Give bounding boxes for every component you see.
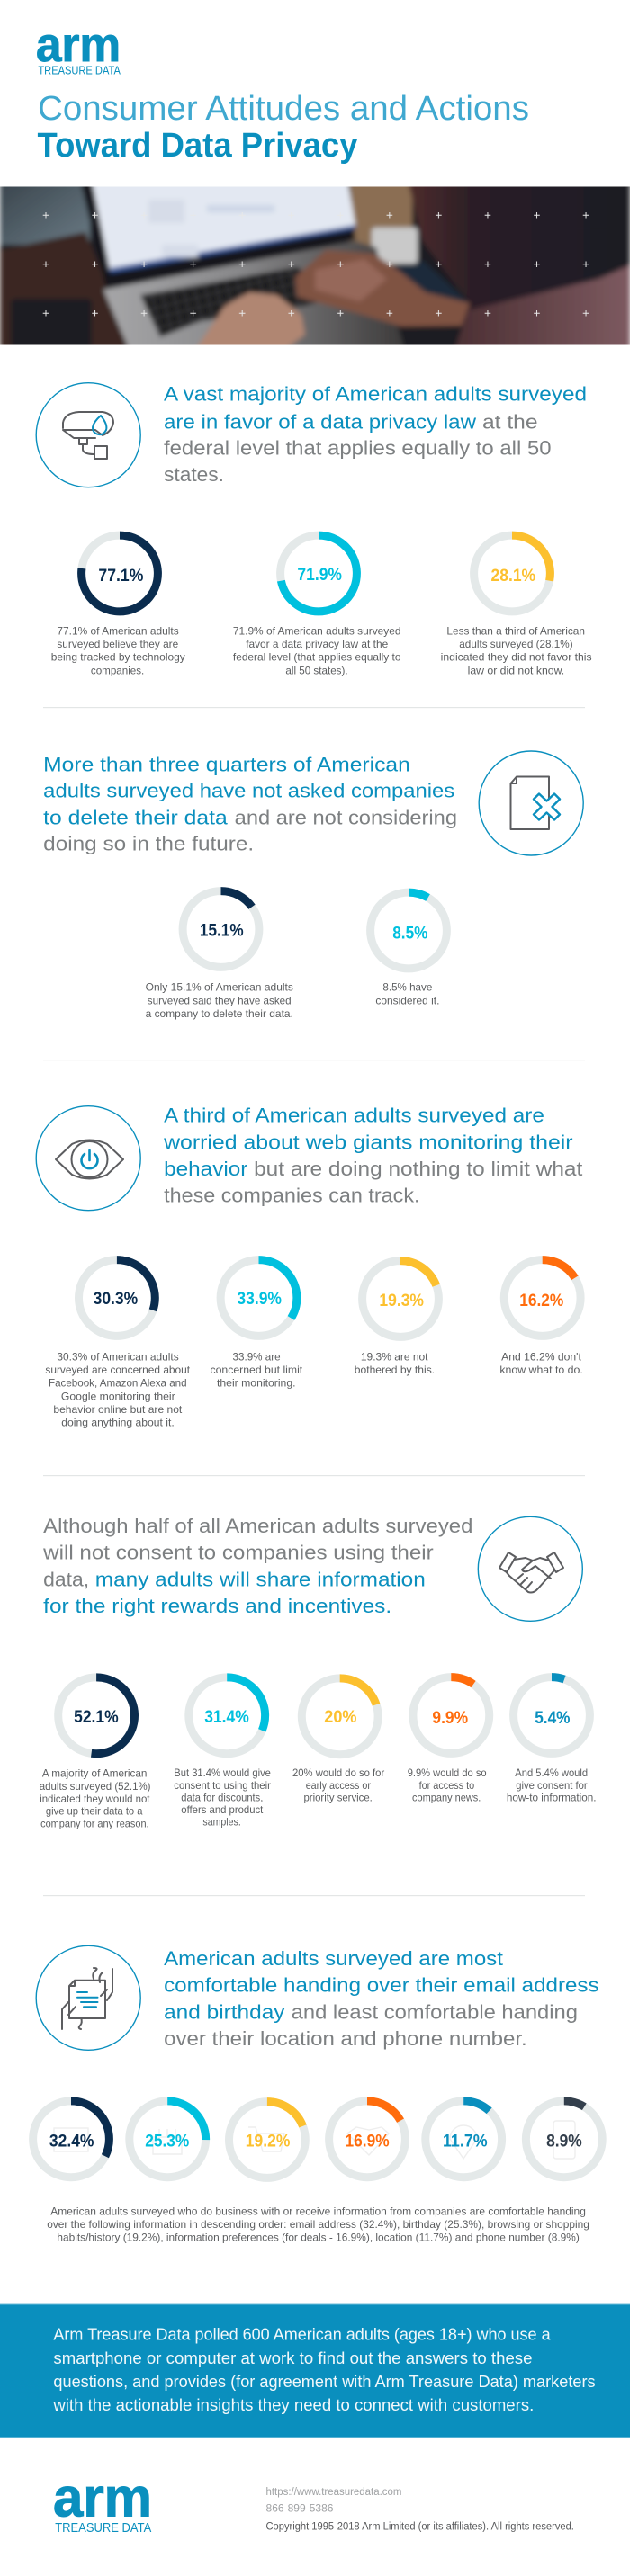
caption: 71.9% (233, 625, 401, 676)
heading: for the right rewards and incentives. (43, 1595, 392, 1617)
caption: 9.9%: 9.9% would do so (408, 1767, 487, 1779)
caption: 20% (292, 1767, 384, 1803)
caption: 30.3%: doing anything about it. (61, 1417, 175, 1429)
footer contact text (266, 2487, 574, 2533)
caption: 71.9%: all 50 states). (285, 664, 348, 676)
donut: 28.1% (474, 535, 550, 612)
caption: 28.1%: indicated they did not favor this (441, 651, 592, 664)
donut: 8.5% (371, 892, 446, 969)
donut: 16.2%: 16.2% (519, 1292, 563, 1310)
caption: 31.4% (174, 1767, 271, 1828)
caption: 71.9%: federal level (that applies equally to (233, 651, 401, 664)
heading: A third of American adults surveyed are (164, 1105, 544, 1127)
heading: states. (164, 463, 224, 486)
icon: handshake (478, 1516, 582, 1621)
heading: will not consent to companies using their (42, 1542, 434, 1564)
panel: methodology band: smartphone or computer at work to find out the answers to these (53, 2348, 532, 2367)
caption: 33.9% (211, 1350, 303, 1390)
caption: 15.1% (146, 981, 293, 1020)
donut: 5.4% (514, 1677, 590, 1753)
caption: 5.4% (507, 1767, 596, 1803)
heading: and are not considering (235, 806, 457, 828)
heading: American adults surveyed are most (164, 1947, 504, 1970)
donut: 30.3%: 30.3% (94, 1290, 138, 1309)
logo: arm treasure data: TREASURE DATA (38, 64, 121, 77)
caption: 15.1%: a company to delete their data. (146, 1007, 293, 1020)
donut: 25.3% birthday: 25.3% (145, 2133, 189, 2151)
caption: 28.1%: Less than a third of American (446, 625, 585, 638)
footer contact text: https://www.treasuredata.com (266, 2487, 401, 2498)
caption: 9.9%: company news. (412, 1791, 481, 1803)
donut: 71.9% (281, 535, 356, 612)
donut: 77.1% (82, 535, 158, 612)
heading: federal level that applies equally to all 50 (164, 437, 551, 460)
footer contact text: Copyright 1995-2018 Arm Limited (or its affiliates). All rights reserved. (266, 2522, 574, 2533)
caption: 77.1%: companies. (91, 664, 144, 676)
caption: 20%: priority service. (304, 1791, 373, 1803)
donut: 15.1% (183, 891, 259, 967)
caption: 15.1%: surveyed said they have asked (148, 994, 292, 1006)
heading (42, 1515, 472, 1617)
donut: 16.9% preferences (329, 2101, 405, 2178)
icon: eye with power symbol (36, 1106, 140, 1211)
donut: 77.1%: 77.1% (98, 567, 143, 586)
panel: methodology band: questions, and provides (for agreement with Arm Treasure Data) marketers (53, 2372, 596, 2391)
heading: worried about web giants monitoring their (163, 1131, 573, 1153)
caption: 31.4%: But 31.4% would give (174, 1767, 271, 1779)
caption: 52.1%: A majority of American (42, 1767, 147, 1780)
caption: 52.1%: give up their data to a (46, 1804, 143, 1817)
caption: 20%: 20% would do so for (292, 1767, 384, 1779)
donut: 19.3%: 19.3% (379, 1292, 424, 1310)
icon: document with cross (479, 751, 583, 855)
caption: 5.4%: And 5.4% would (515, 1767, 588, 1779)
donut: 9.9%: 9.9% (432, 1709, 468, 1728)
donut: 8.9% phone number: 8.9% (546, 2133, 582, 2151)
caption: 28.1% (441, 625, 592, 676)
donut: 52.1% (58, 1677, 135, 1754)
donut: 16.2% (504, 1260, 580, 1336)
donut: 33.9%: 33.9% (237, 1290, 282, 1309)
heading: data, (43, 1568, 89, 1590)
donut: 20%: 20% (324, 1708, 357, 1727)
icon: hands holding a document (36, 1945, 140, 2050)
title: Consumer Attitudes and Actions (38, 90, 529, 128)
donut: 11.7% location: 11.7% (443, 2133, 488, 2151)
caption: 28.1%: law or did not know. (468, 664, 564, 676)
panel: methodology band: Arm Treasure Data polled 600 American adults (ages 18+) who use a (53, 2325, 551, 2344)
panel: web giants monitoring (36, 1105, 583, 1429)
donut: 25.3% birthday (130, 2101, 206, 2178)
heading (164, 1947, 599, 2050)
caption: 31.4%: offers and product (181, 1803, 264, 1816)
caption: 9.9% (408, 1767, 487, 1803)
caption: 77.1%: 77.1% of American adults (57, 625, 179, 638)
donut: 20% (302, 1678, 378, 1755)
caption: 52.1%: indicated they would not (40, 1793, 150, 1805)
title: Toward Data Privacy (38, 127, 358, 165)
caption: descending order list: habits/history (19.2%), information preferences (for deals - 16.9%), location (11.7%) and phone number (8.9%) (57, 2232, 580, 2244)
caption: 5.4%: how-to information. (507, 1791, 596, 1803)
donut: 31.4%: 31.4% (204, 1708, 249, 1727)
caption: 52.1%: adults surveyed (52.1%) (40, 1780, 150, 1793)
donut: 28.1%: 28.1% (491, 567, 536, 586)
title (38, 90, 529, 165)
heading: More than three quarters of American (43, 753, 410, 775)
heading: comfortable handing over their email address (164, 1974, 599, 1997)
caption: 71.9%: favor a data privacy law at the (246, 638, 389, 650)
caption: 5.4%: give consent for (516, 1779, 588, 1792)
caption: 8.5%: considered it. (375, 994, 439, 1006)
caption: 77.1% (51, 625, 185, 676)
heading: to delete their data (43, 806, 228, 828)
donut: 32.4% email address (33, 2101, 109, 2178)
donut: 33.9% (220, 1260, 297, 1336)
heading (43, 753, 457, 855)
caption: 16.2%: know what to do. (500, 1364, 583, 1376)
caption: 30.3%: Facebook, Amazon Alexa and (49, 1377, 187, 1390)
heading (163, 1105, 583, 1207)
caption: 19.3%: 19.3% are not (361, 1350, 428, 1363)
donut: 30.3% (78, 1260, 155, 1336)
heading: over their location and phone number. (164, 2027, 527, 2050)
caption: 19.3% (355, 1350, 435, 1376)
caption: 71.9%: 71.9% of American adults surveyed (233, 625, 401, 638)
heading: adults surveyed have not asked companies (43, 780, 454, 802)
caption: 77.1%: being tracked by technology (51, 651, 185, 664)
caption: 31.4%: consent to using their (174, 1779, 271, 1792)
caption: 19.3%: bothered by this. (355, 1364, 435, 1376)
caption: 16.2% (500, 1350, 583, 1376)
donut: 31.4% (189, 1677, 266, 1754)
heading: behavior (164, 1158, 248, 1180)
heading: doing so in the future. (43, 833, 254, 855)
donut: 71.9%: 71.9% (297, 566, 342, 585)
donut: 8.9% phone number (526, 2101, 602, 2178)
panel: data privacy law (36, 383, 592, 676)
caption: 9.9%: for access to (419, 1779, 474, 1792)
caption: 52.1% (40, 1767, 150, 1829)
heading: and birthday (164, 2000, 285, 2023)
caption: 30.3%: surveyed are concerned about (45, 1364, 191, 1376)
footer logo: arm treasure data: TREASURE DATA (55, 2520, 151, 2536)
footer logo: arm treasure data: arm (53, 2466, 152, 2527)
donut: 32.4% email address: 32.4% (50, 2133, 94, 2151)
donut: 5.4%: 5.4% (535, 1709, 571, 1728)
panel: methodology band (0, 2304, 630, 2438)
donut: 9.9% (413, 1677, 490, 1753)
donut: 52.1%: 52.1% (74, 1708, 119, 1727)
logo: arm treasure data: arm (36, 18, 121, 72)
caption: 30.3%: Google monitoring their (61, 1390, 176, 1402)
panel: methodology band: with the actionable insights they need to connect with customers. (52, 2395, 534, 2414)
caption: 8.5% (375, 981, 439, 1006)
heading (164, 383, 587, 486)
donut: 15.1%: 15.1% (200, 922, 244, 941)
icon: security camera (36, 383, 140, 487)
heading: and least comfortable handing (292, 2000, 578, 2023)
caption: 16.2%: And 16.2% don't (501, 1350, 582, 1363)
donut: 11.7% location (426, 2101, 502, 2178)
donut: 19.2% shopping: 19.2% (246, 2133, 290, 2151)
caption: 52.1%: company for any reason. (40, 1817, 149, 1829)
caption: descending order list: American adults surveyed who do business with or receive information from companies are comfortable handing (50, 2205, 586, 2217)
heading: Although half of all American adults surveyed (43, 1515, 472, 1537)
caption: 15.1%: Only 15.1% of American adults (146, 981, 293, 994)
donut: 8.5%: 8.5% (392, 924, 428, 943)
panel: comfortable handing over data (33, 1945, 602, 2244)
caption: 20%: early access or (306, 1779, 371, 1792)
caption: descending order list (47, 2205, 590, 2244)
caption: 28.1%: adults surveyed (28.1%) (459, 638, 573, 650)
donut: 19.3% (363, 1261, 438, 1337)
caption: 8.5%: 8.5% have (382, 981, 433, 994)
donut: 19.2% shopping (229, 2102, 305, 2178)
heading: these companies can track. (164, 1185, 419, 1207)
caption: 31.4%: data for discounts, (181, 1791, 263, 1803)
caption: descending order list: over the following information in descending order: email address (32.4%), birthday (25.3%), browsing or shopping (47, 2218, 590, 2231)
caption: 77.1%: surveyed believe they are (57, 638, 179, 650)
heading: many adults will share information (95, 1568, 426, 1590)
heading: A vast majority of American adults surveyed (164, 383, 587, 406)
donut: 16.9% preferences: 16.9% (346, 2133, 390, 2151)
caption: 30.3% (45, 1350, 191, 1429)
heading: at the (482, 410, 538, 433)
caption: 31.4%: samples. (202, 1815, 241, 1828)
heading: are in favor of a data privacy law (164, 410, 477, 433)
caption: 30.3%: behavior online but are not (53, 1403, 183, 1416)
caption: 30.3%: 30.3% of American adults (57, 1350, 179, 1363)
caption: 33.9%: their monitoring. (217, 1377, 295, 1390)
panel: rewards and incentives (40, 1515, 597, 1829)
hero photo: hands typing on a laptop (0, 180, 630, 353)
caption: 33.9%: 33.9% are (232, 1350, 281, 1363)
heading: but are doing nothing to limit what (254, 1158, 583, 1180)
caption: 33.9%: concerned but limit (211, 1364, 303, 1376)
panel: deleting data (43, 751, 583, 1020)
footer contact text: 866-899-5386 (266, 2503, 333, 2514)
